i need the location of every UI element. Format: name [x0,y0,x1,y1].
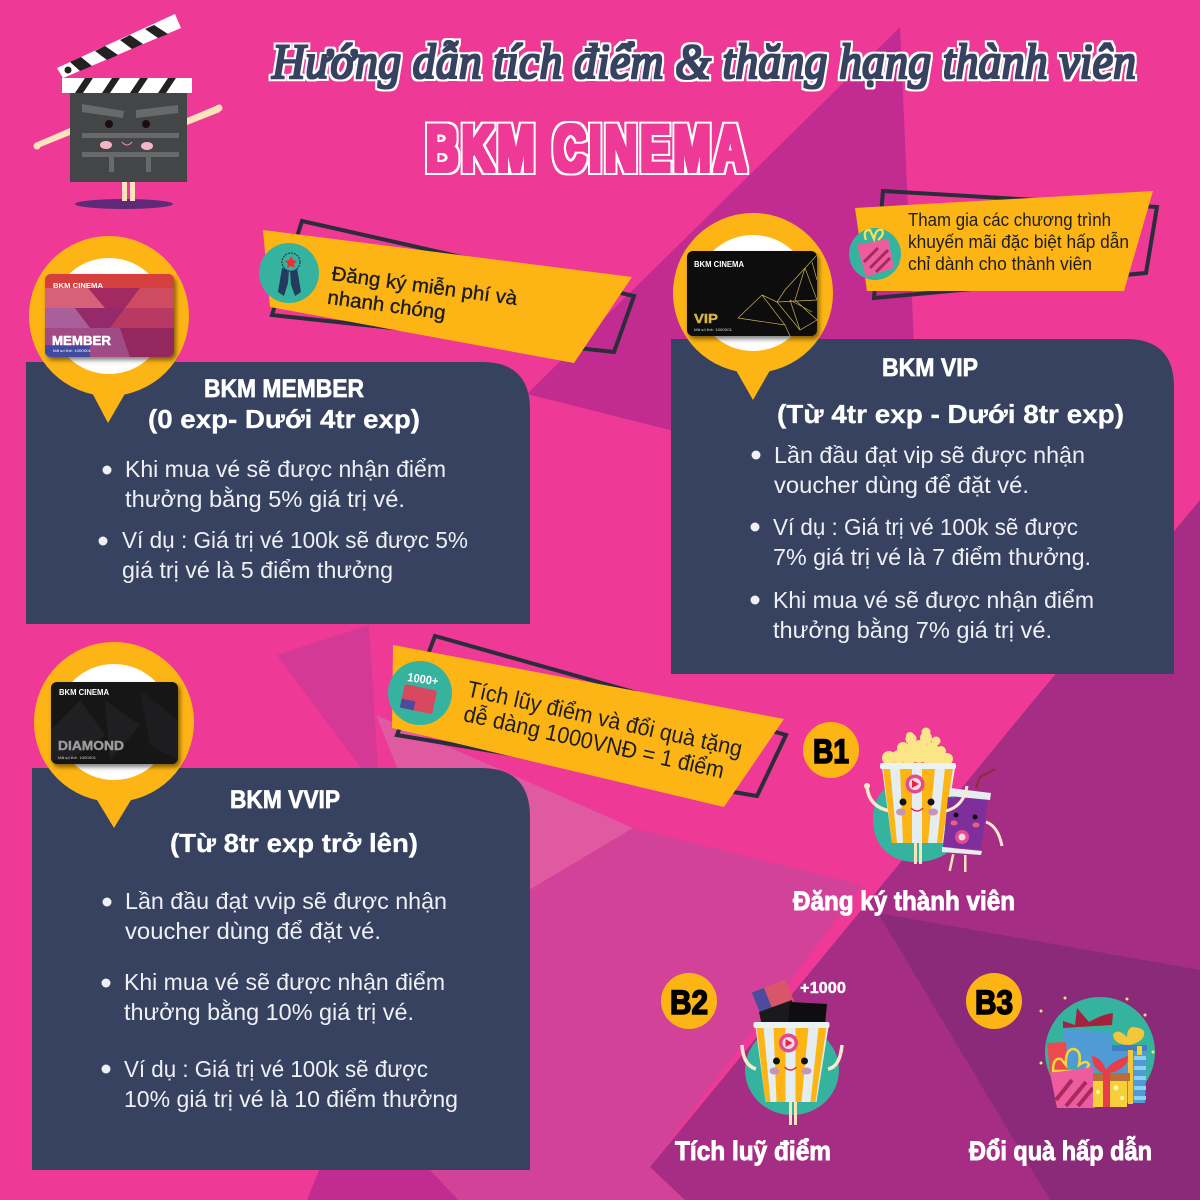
text block: vvip benefits: 10% giá trị vé là 10 điểm thưởng [124,1086,458,1112]
heading: vip tier: BKM VIP [882,354,978,382]
subheading: vvip range: (Từ 8tr exp trở lên) [170,828,418,858]
text block: vip benefits: Lần đầu đạt vip sẽ được nhận [774,442,1085,468]
heading: BKM CINEMA: BKM CINEMA [426,111,750,185]
text block: vip benefits: Khi mua vé sẽ được nhận điểm [773,587,1094,613]
text block: vip benefits: Ví dụ : Giá trị vé 100k sẽ được [773,514,1078,540]
label: collect: Tích luỹ điểm [675,1136,831,1166]
subheading: vip range: (Từ 4tr exp - Dưới 8tr exp) [777,399,1124,429]
pin with vip card: Mã số thẻ: 1000001 [694,327,733,332]
callout: collect points [388,636,786,807]
callout: free registration: nhanh chóng [326,287,447,325]
pin with member card: MEMBER [52,333,112,348]
badge: B3 [966,973,1022,1029]
panel: BKM Member [26,362,530,624]
text block: member benefits: thưởng bằng 5% giá trị vé. [125,486,405,512]
text block: member benefits: Khi mua vé sẽ được nhận điểm [125,456,446,482]
pin with diamond card [34,642,194,828]
badge: B1: B1 [813,733,849,771]
callout: free registration: Đăng ký miễn phí và [330,262,520,310]
heading: member tier: BKM MEMBER [204,375,364,403]
callout: free registration [259,221,634,363]
icon: popcorn with member cards [742,979,846,1125]
callout: exclusive promotions: chỉ dành cho thành viên [908,254,1092,274]
callout: exclusive promotions: khuyến mãi đặc biệt hấp dẫn [908,231,1129,252]
text block: vip benefits: thưởng bằng 7% giá trị vé. [773,617,1052,643]
badge: B3: B3 [975,984,1013,1022]
callout: collect points: dễ dàng 1000VNĐ = 1 điểm [461,700,727,783]
pin with vip card: BKM CINEMA [694,260,744,269]
pin with diamond card: DIAMOND [58,738,124,753]
pin with diamond card: Mã số thẻ: 1000001 [58,755,97,760]
label: redeem: Đổi quà hấp dẫn [969,1135,1152,1166]
pin with vip card: VIP [694,311,718,326]
text block: vip benefits: voucher dùng để đặt vé. [774,472,1029,498]
badge: B2: B2 [670,984,708,1022]
callout: collect points: 1000+ [407,670,439,688]
pin with member card: BKM CINEMA [53,283,103,290]
badge: B2 [661,973,717,1029]
pin with member card [29,236,189,423]
text block: vvip benefits: Ví dụ : Giá trị vé 100k sẽ được [124,1056,428,1082]
text block: member benefits: Ví dụ : Giá trị vé 100k sẽ được 5% [122,527,468,553]
callout: collect points: Tích lũy điểm và đổi quà tặng [465,675,745,762]
pin with vip card [673,213,833,400]
pin with diamond card: BKM CINEMA [59,688,109,697]
panel: BKM VVIP [32,768,530,1170]
callout: exclusive promotions [849,191,1157,298]
text block: vvip benefits [102,888,458,1112]
icon: clapperboard mascot [34,14,222,209]
callout: exclusive promotions: Tham gia các chương trình [908,210,1111,230]
badge: B1 [803,722,859,778]
text block: vip benefits: 7% giá trị vé là 7 điểm thưởng. [773,544,1091,570]
panel: BKM VIP [671,339,1174,674]
pin with member card: Mã số thẻ: 1000001 [53,348,92,353]
subheading: member range: (0 exp- Dưới 4tr exp) [148,404,420,434]
label: register: Đăng ký thành viên [793,886,1015,916]
heading: vvip tier: BKM VVIP [230,786,340,814]
title: Hướng dẫn tích điểm & thăng hạng thành viên [271,33,1136,89]
text block: vvip benefits: voucher dùng để đặt vé. [125,918,381,944]
icon: popcorn with member cards: +1000 [800,980,846,997]
text block: member benefits [98,456,468,583]
text block: vvip benefits: thưởng bằng 10% giá trị vé. [124,999,414,1025]
text block: vip benefits [750,442,1094,643]
text block: member benefits: giá trị vé là 5 điểm thưởng [122,557,393,583]
icon: gift boxes [1040,996,1155,1108]
icon: popcorn and drink mascots [864,728,1002,872]
text block: vvip benefits: Khi mua vé sẽ được nhận điểm [124,969,445,995]
text block: vvip benefits: Lần đầu đạt vvip sẽ được nhận [125,888,447,914]
